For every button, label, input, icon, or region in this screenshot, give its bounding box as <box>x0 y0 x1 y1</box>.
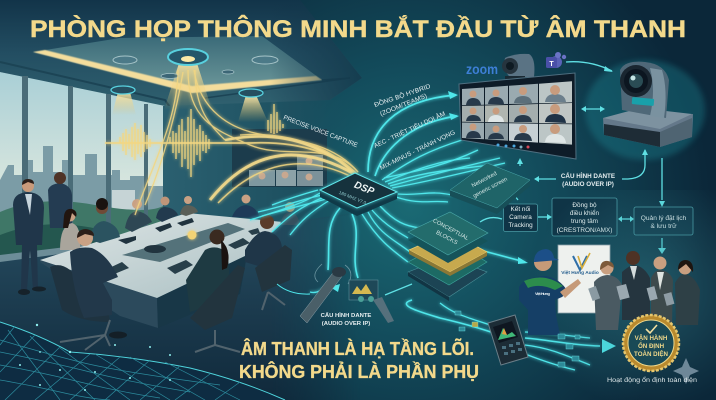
tagline <box>239 338 479 382</box>
label: dante configuration lower: (AUDIO OVER IP) <box>322 321 370 327</box>
handheld microphone remote <box>277 264 351 323</box>
rotated feature labels <box>372 80 457 172</box>
windows with city view <box>0 72 165 264</box>
box: camera tracking: Camera <box>509 214 532 221</box>
box: central control: (CRESTRON/AMX) <box>557 227 612 234</box>
handheld audio analyzer <box>488 315 528 365</box>
box: scheduling <box>634 207 693 235</box>
whiteboard with Việt Hưng Audio logo: Việt Hưng Audio <box>561 270 599 276</box>
networked screen block <box>450 163 530 214</box>
badge: stable operation: VẬN HÀNH <box>635 335 668 342</box>
label: dante configuration lower <box>321 311 371 327</box>
data packets on signal line <box>455 311 580 367</box>
technician: Việt Hưng <box>535 291 551 296</box>
double arrows near stack <box>385 218 502 295</box>
box: scheduling: Quản lý đặt lịch <box>641 215 687 222</box>
conceptual blocks stack <box>408 212 488 301</box>
icon: webcam on display <box>502 54 534 80</box>
title: PHÒNG HỌP THÔNG MINH BẮT ĐẦU TỪ ÂM THANH <box>30 15 686 43</box>
group of four attendees <box>588 251 700 330</box>
icon: sparkle <box>673 358 699 384</box>
box: camera tracking: Kết nối <box>511 204 530 213</box>
tagline: KHÔNG PHẢI LÀ PHẦN PHỤ <box>239 361 479 382</box>
seated attendees far side <box>60 194 300 250</box>
label: dante configuration lower: CẤU HÌNH DANTE <box>321 311 371 319</box>
icon: teams logo <box>546 52 566 68</box>
box: central control: điều khiển <box>570 208 600 217</box>
conceptual blocks stack: BLOCKS <box>435 230 458 246</box>
floor <box>0 221 322 400</box>
conference table <box>40 213 283 328</box>
ceiling <box>0 0 362 110</box>
whiteboard with Việt Hưng Audio logo <box>558 245 610 313</box>
box: central control <box>552 198 617 236</box>
label: precise voice capture: PRECISE VOICE CAPTURE <box>282 114 359 149</box>
arrowheads near camera <box>510 66 666 254</box>
label: dante configuration right: CẤU HÌNH DANTE <box>561 170 615 180</box>
box: central control: Đồng bộ <box>572 200 597 209</box>
DSP chip <box>320 173 397 216</box>
arrowheads <box>330 91 616 353</box>
rotated feature labels: (ZOOM/TEAMS) <box>379 93 428 118</box>
DSP chip: DSP <box>352 180 376 198</box>
networked screen block: Networked <box>471 171 498 189</box>
ceiling speakers with sound beams <box>111 49 278 122</box>
panel: meeting room <box>0 0 362 400</box>
box: scheduling: & lưu trữ <box>650 223 677 230</box>
rotated feature labels: ĐỒNG BỘ HYBRID <box>372 80 432 109</box>
box: central control: trung tâm <box>571 218 598 225</box>
glow behind team <box>520 190 716 400</box>
zoom logo: zoom <box>466 61 498 77</box>
golden sound waveforms and voice capture streams <box>105 70 358 215</box>
wall display with remote participants <box>232 129 327 187</box>
standing attendees <box>13 172 72 295</box>
panel: PTZ camera <box>585 60 705 160</box>
icon: teams logo: T <box>549 61 554 68</box>
box: camera tracking <box>504 204 538 232</box>
badge: stable operation <box>623 315 679 371</box>
networked screen block: generic screen <box>472 177 509 200</box>
cyan signal flows from DSP <box>250 95 600 370</box>
tagline: ÂM THANH LÀ HẠ TẦNG LÕI. <box>241 338 474 359</box>
DSP chip: 180 MHZ V7.0 <box>338 190 367 206</box>
conceptual blocks stack: CONCEPTUAL <box>432 218 470 242</box>
badge caption: Hoạt động ổn định toàn diện <box>607 376 698 384</box>
rotated feature labels: AEC - TRIỆT TIÊU DỌI ÂM <box>372 109 447 150</box>
technician <box>519 249 581 335</box>
badge: stable operation: TOÀN DIỆN <box>634 350 668 358</box>
bottom-left digital mesh <box>0 322 285 400</box>
back wall <box>163 100 350 240</box>
panel: video conference display <box>459 73 576 159</box>
tablet with audio charts and remote <box>349 280 394 323</box>
rotated feature labels: MIX-MINUS - TRÁNH VỌNG <box>378 127 457 172</box>
connection arrows around camera <box>512 62 662 250</box>
label: dante configuration right: (AUDIO OVER IP) <box>562 181 614 188</box>
badge: stable operation: ỔN ĐỊNH <box>638 343 665 350</box>
seated attendees near side with chairs <box>50 215 292 352</box>
label: dante configuration right <box>561 170 615 188</box>
box: camera tracking: Tracking <box>508 222 533 229</box>
